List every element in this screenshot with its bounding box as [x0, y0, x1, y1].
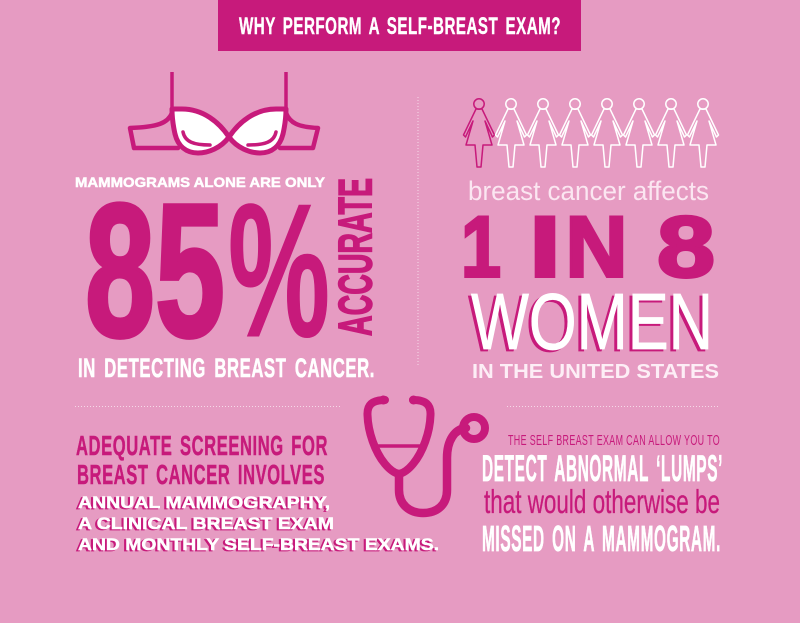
text: in the united states: IN THE UNITED STATES — [472, 361, 719, 383]
text: self breast exam detection — [482, 432, 723, 559]
text: annual mammography list: A CLINICAL BREAST EXAM — [76, 515, 332, 534]
text: adequate screening — [76, 430, 328, 490]
divider: dotted lines — [75, 97, 720, 406]
text: adequate screening: BREAST CANCER INVOLVES — [77, 459, 325, 490]
text: annual mammography list: AND MONTHLY SELF-BREAST EXAMS. — [78, 535, 439, 554]
statistic: 85%: 85 — [85, 165, 225, 377]
icon: bra — [130, 72, 318, 153]
text: mammograms alone are only: MAMMOGRAMS ALONE ARE ONLY — [75, 174, 326, 190]
statistic: 1 in 8: I — [529, 200, 561, 296]
text: women: WOMEN — [471, 277, 713, 366]
text: women: WOMEN — [468, 279, 710, 368]
statistic: 1 in 8: N — [566, 200, 628, 296]
icon: stethoscope — [367, 396, 485, 513]
statistic: 85%: % — [228, 165, 330, 377]
icon row: eight women — [464, 99, 718, 167]
text: annual mammography list: ANNUAL MAMMOGRAPHY, — [76, 494, 328, 513]
text: adequate screening: ADEQUATE SCREENING FOR — [76, 430, 328, 461]
text: in detecting breast cancer: IN DETECTING BREAST CANCER. — [78, 353, 375, 383]
text: annual mammography list — [76, 493, 439, 555]
text: annual mammography list: A CLINICAL BREAST EXAM — [78, 514, 334, 533]
statistic: 1 in 8: 8 — [657, 200, 715, 296]
text: breast cancer affects: breast cancer affects — [468, 176, 709, 206]
statistic: 1 in 8: 1 — [461, 200, 501, 296]
header banner: WHY PERFORM A SELF-BREAST EXAM? — [239, 13, 561, 40]
header banner — [218, 0, 581, 51]
text: annual mammography list: ANNUAL MAMMOGRAPHY, — [78, 493, 330, 512]
text: accurate: ACCURATE — [328, 178, 382, 336]
text: annual mammography list: AND MONTHLY SELF-BREAST EXAMS. — [76, 536, 437, 555]
